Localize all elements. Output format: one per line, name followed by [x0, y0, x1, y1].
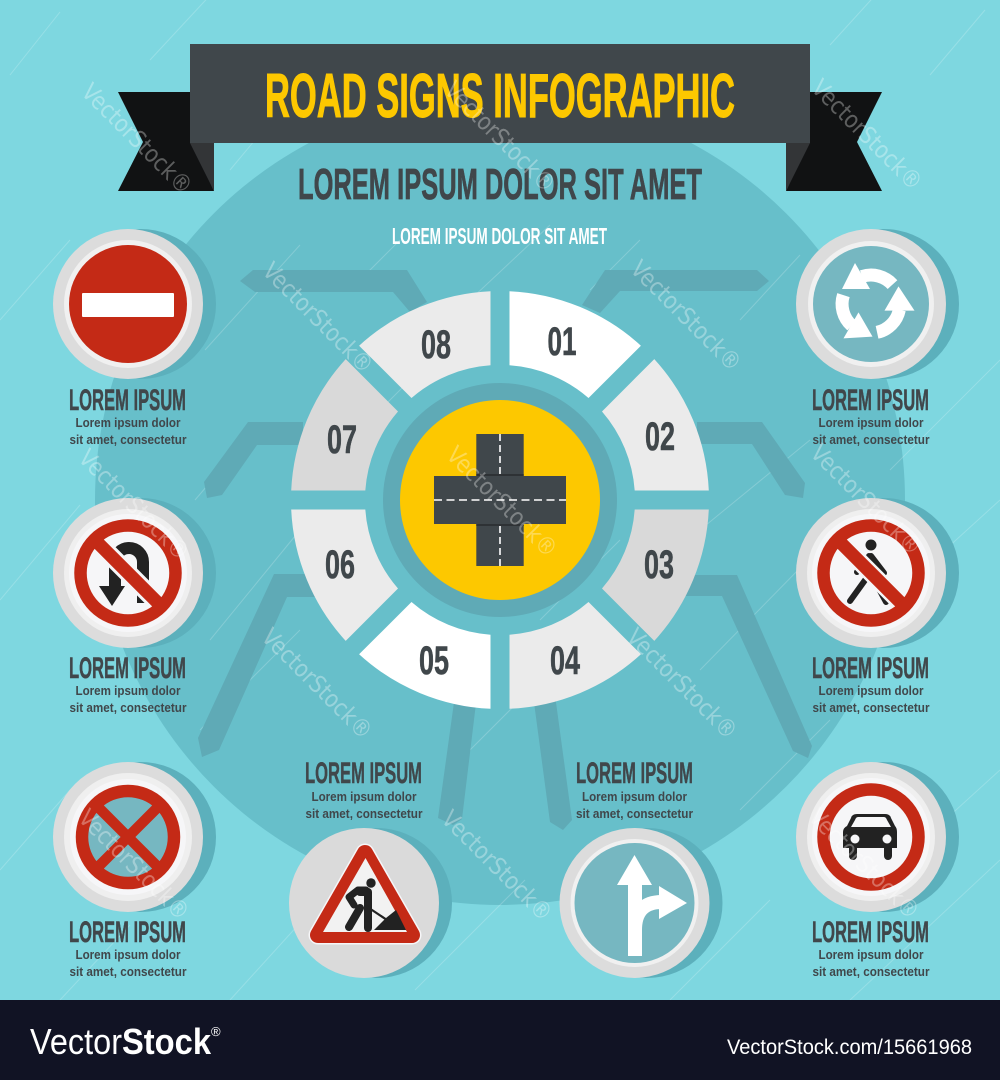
- sign: no cars: [796, 762, 959, 912]
- label: no stopping: LOREM IPSUM: [69, 916, 186, 949]
- footer logo: ®: [211, 1024, 221, 1039]
- label: roundabout: [812, 384, 930, 447]
- segment 02: [602, 359, 709, 490]
- label: road works: [305, 757, 423, 821]
- label: no U-turn: LOREM IPSUM: [69, 652, 186, 685]
- banner right tail: [786, 92, 882, 191]
- label: no cars: [812, 916, 930, 979]
- number 02: 02: [645, 415, 675, 459]
- label: no U-turn: sit amet, consectetur: [70, 701, 187, 715]
- segment 01: [510, 291, 641, 398]
- label: no stopping: Lorem ipsum dolor: [76, 948, 181, 962]
- connector: middle left: [204, 422, 303, 498]
- number 06: 06: [325, 543, 355, 587]
- label: no cars: Lorem ipsum dolor: [818, 948, 924, 962]
- number 07: 07: [327, 418, 357, 462]
- segment 08: [359, 291, 490, 398]
- label: no stopping: sit amet, consectetur: [70, 965, 187, 979]
- sign: road works: [289, 828, 452, 978]
- label: no U-turn: [69, 652, 187, 715]
- sign: no entry: [53, 229, 216, 379]
- watermarks: VectorStock®: [76, 78, 198, 200]
- watermarks: VectorStock®: [73, 804, 195, 926]
- label: road works: sit amet, consectetur: [306, 807, 423, 821]
- label: no cars: sit amet, consectetur: [812, 965, 930, 979]
- footer id: VectorStock.com/15661968: [727, 1036, 972, 1059]
- number 01: 01: [548, 320, 576, 364]
- watermarks: VectorStock®: [436, 805, 558, 927]
- watermarks: [73, 74, 928, 927]
- watermarks: VectorStock®: [625, 255, 747, 377]
- central wheel: [291, 291, 709, 709]
- label: no entry: Lorem ipsum dolor: [76, 416, 181, 430]
- segment 07: [291, 359, 398, 490]
- label: no entry: sit amet, consectetur: [70, 433, 187, 447]
- connector: bottom left: [438, 695, 477, 825]
- segment 05: [359, 602, 490, 709]
- banner body: [190, 44, 810, 143]
- watermarks: VectorStock®: [257, 257, 379, 379]
- footer bar: [0, 1000, 1000, 1080]
- connector: top right: [582, 270, 769, 313]
- label: no entry: [69, 384, 187, 447]
- number 08: 08: [421, 323, 451, 367]
- sign: no stopping: [53, 762, 216, 912]
- label: road works: Lorem ipsum dolor: [312, 790, 417, 804]
- label: road works: LOREM IPSUM: [305, 757, 422, 790]
- label: roundabout: Lorem ipsum dolor: [818, 416, 924, 430]
- banner left tail: [118, 92, 214, 191]
- banner: [118, 44, 882, 191]
- connector: bottom right: [533, 695, 572, 830]
- sign: no U-turn: [53, 498, 216, 648]
- label: straight or right: sit amet, consectetur: [576, 807, 693, 821]
- label: straight or right: Lorem ipsum dolor: [582, 790, 687, 804]
- sign: no pedestrians: [796, 498, 959, 648]
- watermarks: VectorStock®: [256, 623, 378, 745]
- label: no pedestrians: [812, 652, 930, 715]
- banner right fold: [786, 143, 810, 191]
- connector: middle right: [697, 422, 805, 498]
- label: no stopping: [69, 916, 187, 979]
- segment 03: [602, 510, 709, 641]
- watermarks: VectorStock®: [439, 76, 561, 198]
- connector: top left: [240, 270, 427, 312]
- segment 06: [291, 510, 398, 641]
- sub-heading: LOREM IPSUM DOLOR SIT AMET: [392, 223, 607, 249]
- number 03: 03: [644, 543, 674, 587]
- watermarks: VectorStock®: [441, 441, 563, 563]
- watermarks: VectorStock®: [73, 444, 195, 566]
- large background circle: [95, 95, 905, 905]
- connector: lower left: [198, 574, 320, 757]
- number 05: 05: [419, 639, 449, 683]
- label: no U-turn: Lorem ipsum dolor: [76, 684, 181, 698]
- watermarks: VectorStock®: [803, 803, 925, 925]
- footer logo: VectorStock: [30, 1021, 220, 1062]
- label: no entry: LOREM IPSUM: [69, 384, 186, 417]
- connector: lower right: [680, 575, 812, 758]
- label: no pedestrians: sit amet, consectetur: [812, 701, 930, 715]
- label: roundabout: sit amet, consectetur: [812, 433, 930, 447]
- watermarks: VectorStock®: [621, 623, 743, 745]
- subtitle: LOREM IPSUM DOLOR SIT AMET: [298, 160, 702, 209]
- watermarks: VectorStock®: [806, 74, 928, 196]
- banner left fold: [190, 143, 214, 191]
- label: straight or right: LOREM IPSUM: [576, 757, 693, 790]
- label: no pedestrians: Lorem ipsum dolor: [818, 684, 924, 698]
- icon: road crossing hub: [383, 383, 617, 617]
- label: straight or right: [576, 757, 693, 821]
- sign: roundabout: [796, 229, 959, 379]
- number 04: 04: [550, 639, 581, 683]
- segment 04: [510, 602, 641, 709]
- watermarks: VectorStock®: [805, 439, 927, 561]
- sign: straight or right: [560, 828, 722, 978]
